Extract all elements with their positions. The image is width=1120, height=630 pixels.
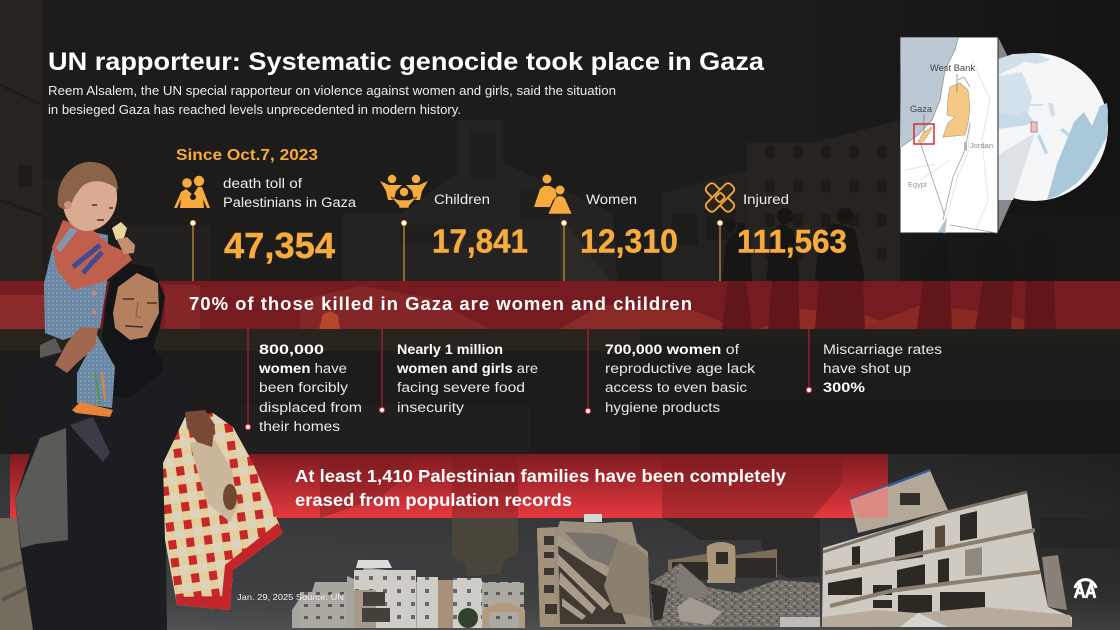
face [113,273,159,340]
fact: 700,000 women: access to even basic [605,380,747,395]
top block [850,470,948,533]
woman hand on blanket [185,410,215,447]
icon: bandages [704,182,736,213]
stat: death toll: 47,354 [224,225,335,266]
collapsing tower [537,514,653,627]
sock [70,417,110,462]
orange cuff [72,402,113,417]
main walls [822,492,1072,627]
window openings [828,511,985,615]
silhouettes of people [722,208,1054,281]
child overalls [44,228,108,340]
stat: injured: Injured [743,192,789,207]
fact: 800,000 women: been forcibly [259,380,348,395]
concrete beams [823,492,1027,552]
building row left [292,560,525,628]
stat: women [534,174,678,281]
stat: death toll [174,176,357,281]
photo: woman carrying child [7,162,283,630]
fact: 800,000 women [245,329,362,434]
map panel: West Bank [930,63,975,74]
fact: 800,000 women: 800,000 [259,342,324,357]
shoulder strap [56,228,78,252]
large ruined building right [822,470,1072,627]
map panel [900,37,998,233]
blanket [163,413,283,610]
fact: miscarriage rates: 300% [823,380,865,395]
fact: 700,000 women: reproductive age lack [605,361,755,376]
date and source: Jan. 29, 2025 Source: UN [237,592,344,602]
fact: 800,000 women: women have [258,361,347,376]
child sweater [52,220,132,290]
icon: women [534,174,572,214]
cardigan shoulder [40,338,62,358]
map panel: Egypt [908,182,927,189]
fact: 1 million women and girls [379,329,538,415]
headline in red band: 70% of those killed in Gaza are women and children [189,293,692,314]
red banner: families erased [10,454,888,518]
destroyed buildings [292,470,1072,628]
child lower leg [77,335,115,408]
bread and hand [112,222,127,240]
map panel: Jordan [970,143,993,150]
woman robe [7,345,193,630]
hijab [102,263,165,397]
AA logo [1075,580,1096,598]
side block [1042,555,1067,610]
fact: 700,000 women [585,329,755,415]
fact: miscarriage rates [806,329,942,395]
stat: death toll: death toll of [223,176,302,191]
cardigan [15,428,68,548]
intro text: in besieged Gaza has reached levels unprecedented in modern history. [48,103,461,117]
red band background [0,281,1120,329]
locator map [900,37,1108,233]
fact: 700,000 women: 700,000 women of [605,342,739,357]
stat: children: 17,841 [432,222,528,260]
red banner: families erased: erased from population records [295,490,572,510]
woman hand on child [55,327,98,373]
fact: 1 million women and girls: women and girls are [396,361,538,376]
title: UN rapporteur: Systematic genocide took place in Gaza [48,48,765,76]
icon: children [380,175,428,208]
stat: death toll: Palestinians in Gaza [223,195,357,210]
fact: 800,000 women: displaced from [259,400,362,415]
stat: children [380,175,528,281]
fact: miscarriage rates: have shot up [823,361,911,376]
fact: 800,000 women: their homes [259,419,340,434]
since date: Since Oct.7, 2023 [176,147,318,164]
stat: women: 12,310 [580,222,678,260]
red banner: families erased: At least 1,410 Palestinian families have been completely [295,466,786,486]
intro text [48,84,616,117]
stat: children: Children [434,192,490,207]
fact: 700,000 women: hygiene products [605,400,720,415]
child head [62,162,117,231]
fact: 1 million women and girls: facing severe food [397,380,525,395]
rubble pile [650,542,820,627]
stat: injured: 111,563 [737,224,847,260]
icon: family [174,176,210,208]
fact: miscarriage rates: Miscarriage rates [823,342,942,357]
map panel: Gaza [910,104,933,115]
debris [822,607,1072,627]
fact: 1 million women and girls: Nearly 1 million [397,342,503,357]
stat: women: Women [586,192,637,207]
intro text: Reem Alsalem, the UN special rapporteur on violence against women and girls, said the situation [48,84,616,98]
fact: 1 million women and girls: insecurity [397,400,464,415]
stat: injured [704,182,847,281]
globe [960,37,1108,232]
